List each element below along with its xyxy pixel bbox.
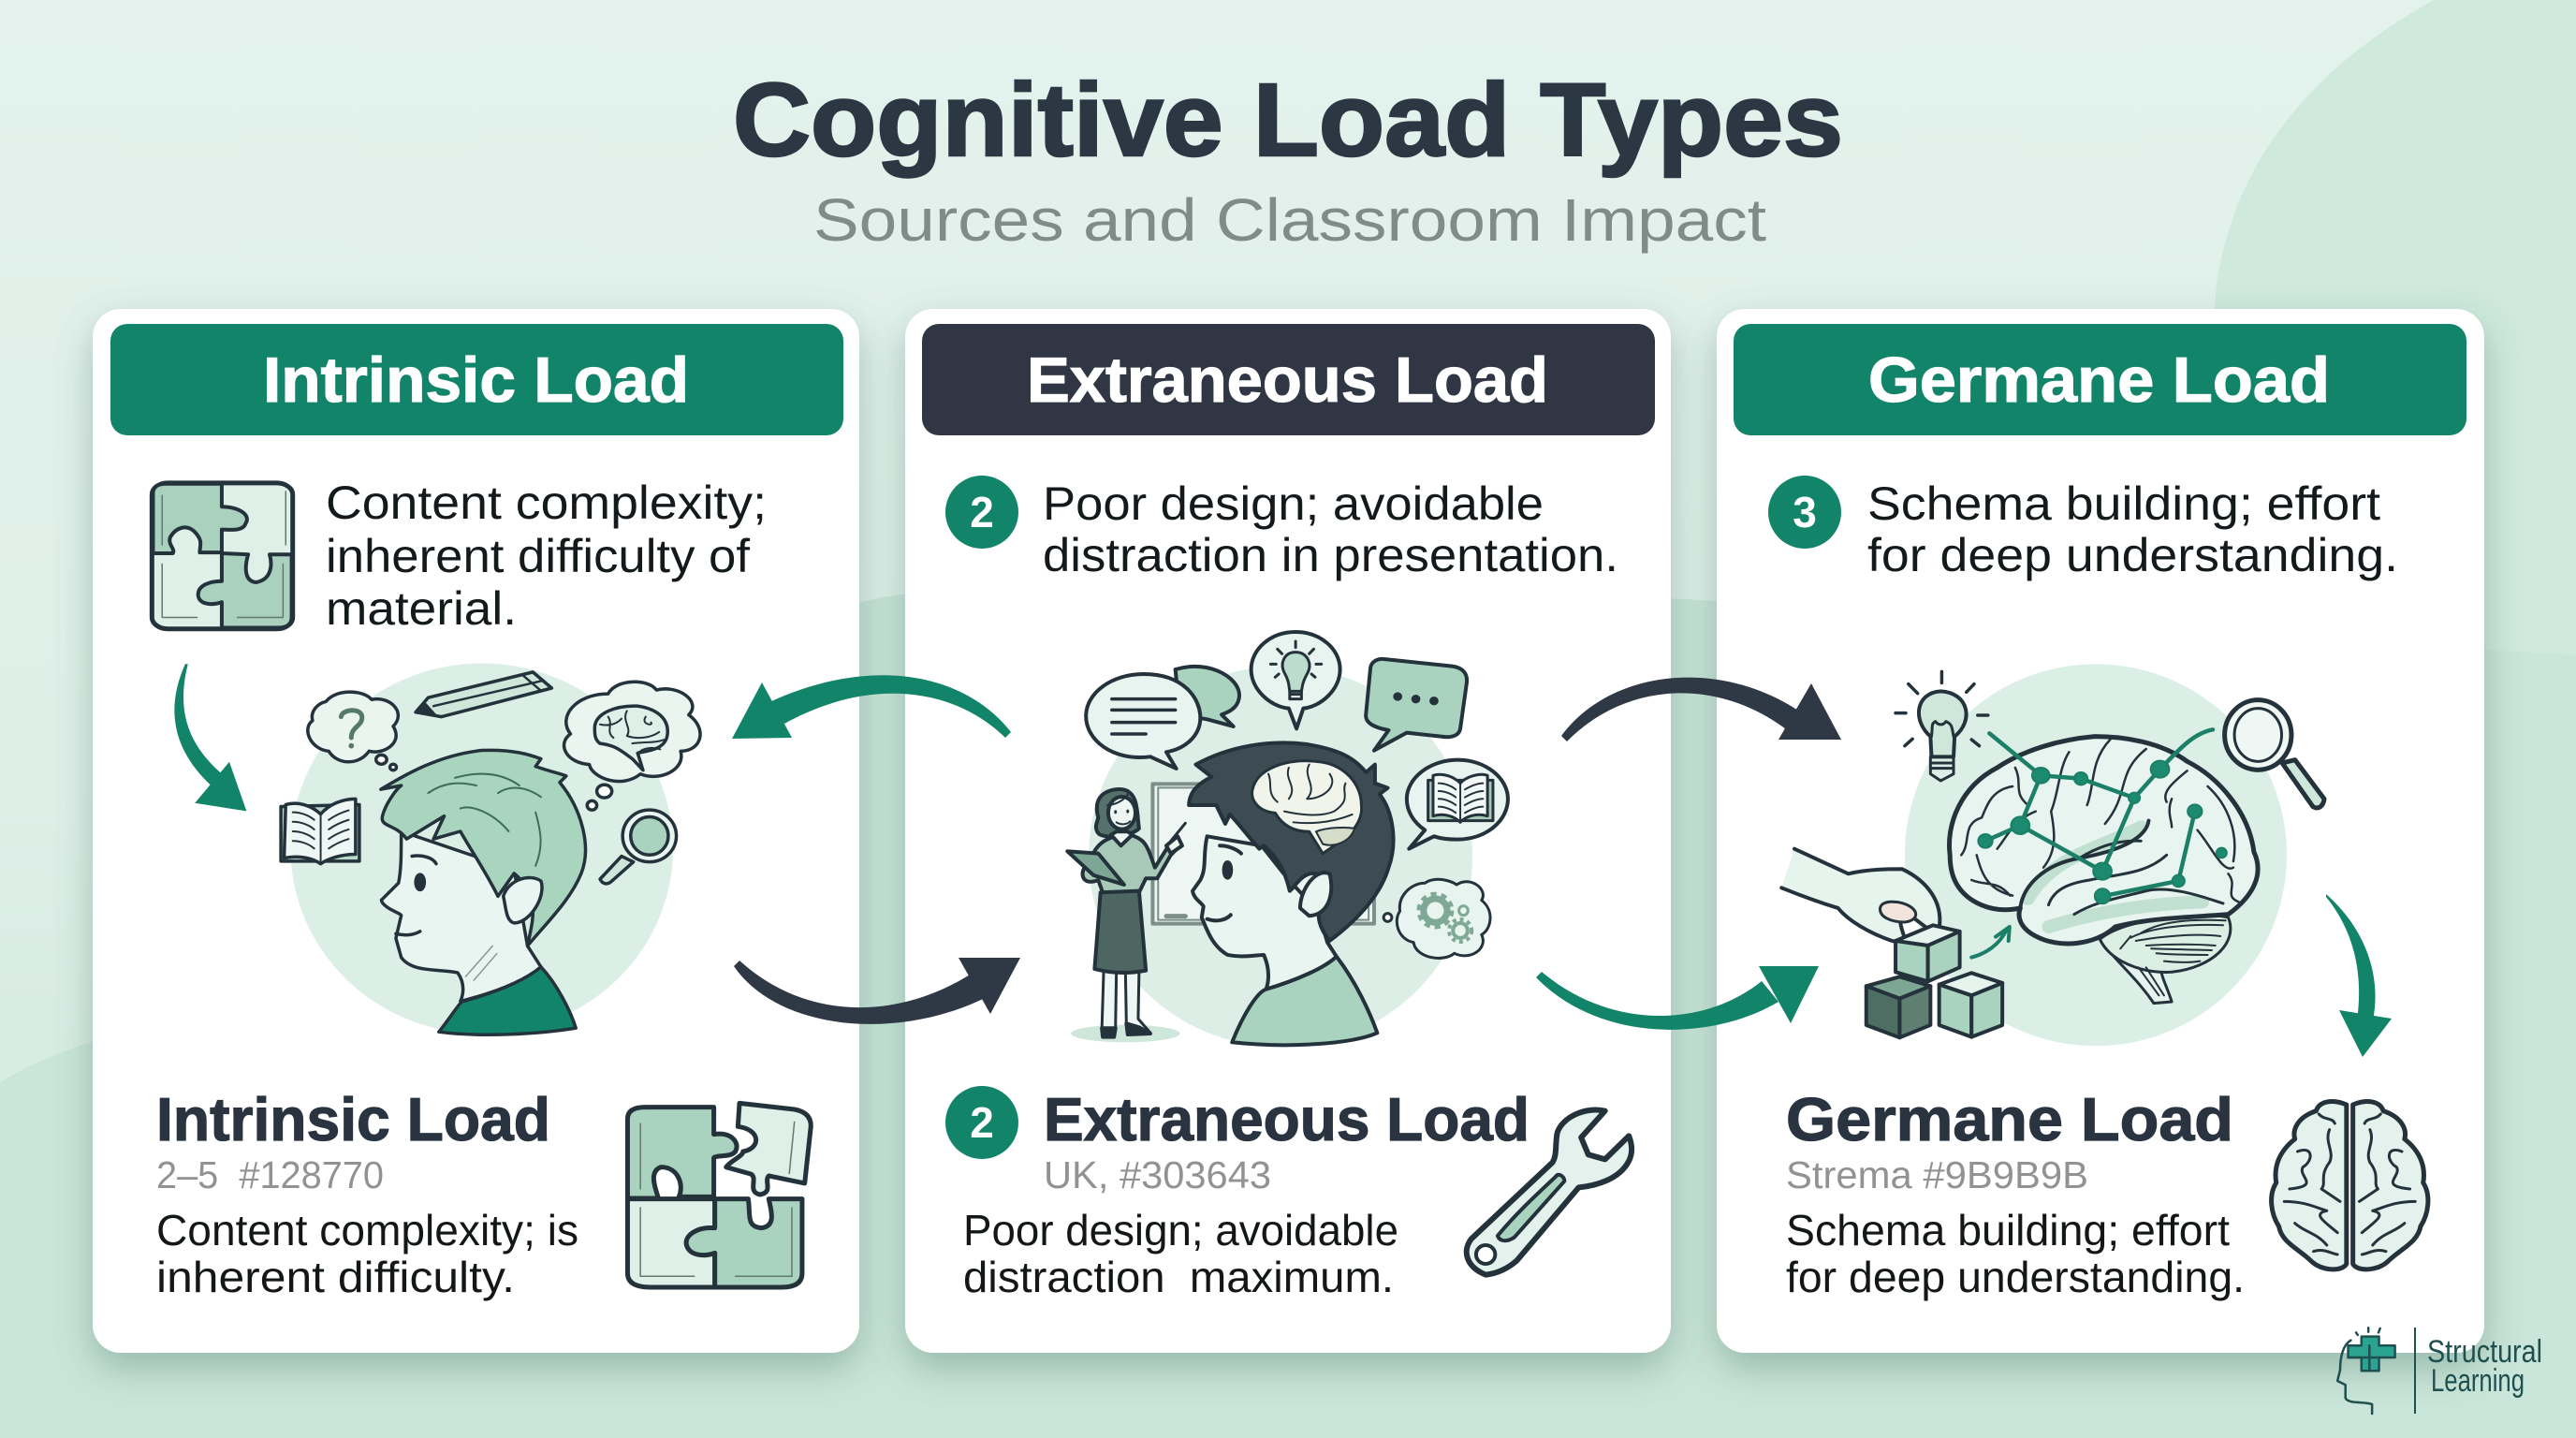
logo text: Learning <box>2431 1363 2525 1399</box>
body: intrinsic: inherent difficulty. <box>156 1253 515 1301</box>
open book <box>281 799 359 864</box>
number badge 2: 2 <box>970 488 994 536</box>
number badge 3: 3 <box>1793 488 1817 536</box>
body: intrinsic: Content complexity; is <box>156 1206 578 1255</box>
text: extraneous description: distraction in presentation. <box>1043 529 1618 581</box>
text: germane description: for deep understanding. <box>1867 529 2398 581</box>
illustration: boy thinking <box>281 663 700 1034</box>
light bulb <box>1895 671 1988 781</box>
meta: intrinsic: 2–5 #128770 <box>156 1153 384 1196</box>
panel: germane load <box>1717 309 2484 1353</box>
text: extraneous description: Poor design; avoidable <box>1043 477 1544 530</box>
text: intrinsic description: inherent difficulty of <box>326 530 750 582</box>
text: germane description: Schema building; effort <box>1867 477 2380 530</box>
icon: separated puzzle <box>627 1103 811 1287</box>
speech bubble: dots <box>1366 659 1467 751</box>
brain with network <box>1949 729 2258 1004</box>
speech bubble: text lines <box>1086 667 1239 769</box>
title: Cognitive Load Types <box>733 63 1843 178</box>
panel: extraneous load <box>905 309 1671 1353</box>
subtitle: Sources and Classroom Impact <box>813 186 1766 254</box>
small green arrow <box>1971 927 2010 958</box>
thought cloud: brain <box>564 682 700 810</box>
body: germane: Schema building; effort <box>1786 1206 2230 1255</box>
body: germane: for deep understanding. <box>1786 1253 2245 1301</box>
card background <box>1717 309 2484 1353</box>
bubble: light bulb <box>1251 632 1340 728</box>
number badge 2 lower: 2 <box>970 1098 994 1147</box>
pencil <box>416 672 551 717</box>
card background <box>905 309 1671 1353</box>
text: intrinsic description: Content complexity; <box>326 477 767 529</box>
hand <box>1781 849 1939 944</box>
thought cloud: question <box>308 692 398 770</box>
meta: germane: Strema #9B9B9B <box>1786 1153 2088 1196</box>
icon: wrench <box>1467 1109 1632 1275</box>
number badge 2 lower <box>945 1086 1018 1159</box>
text: germane description <box>1867 477 2398 581</box>
number badge 3 <box>1768 476 1841 549</box>
number badge 2 <box>945 476 1018 549</box>
body: extraneous: distraction maximum. <box>963 1253 1394 1301</box>
icon: brain top view <box>2272 1102 2428 1269</box>
subheading row: extraneous load <box>945 1085 1530 1159</box>
text: intrinsic description: material. <box>326 582 517 635</box>
subheading: germane load: Germane Load <box>1786 1085 2233 1153</box>
panel: intrinsic load <box>93 309 859 1353</box>
subheading text: Extraneous Load <box>1044 1085 1530 1153</box>
logo divider <box>2414 1328 2416 1414</box>
card background <box>93 309 859 1353</box>
magnifier <box>2225 700 2324 808</box>
meta: extraneous: UK, #303643 <box>1044 1153 1271 1196</box>
header: intrinsic load <box>110 324 843 435</box>
boy head <box>381 750 585 1034</box>
arrow: green curve to left panel <box>732 675 1011 739</box>
header: extraneous load <box>922 324 1655 435</box>
student head with brain <box>1189 742 1394 1045</box>
blocks <box>1866 925 2002 1037</box>
teacher <box>1067 789 1185 1042</box>
body: extraneous <box>963 1206 1398 1301</box>
subheading: intrinsic load: Intrinsic Load <box>156 1085 550 1153</box>
body: intrinsic <box>156 1206 578 1301</box>
logo: structural learning <box>2337 1328 2542 1414</box>
magnifier <box>600 810 677 884</box>
bubble: book <box>1407 760 1508 849</box>
logo icon: head with blocks <box>2337 1328 2395 1414</box>
logo text: Structural <box>2427 1334 2542 1370</box>
illustration: brain network and building blocks <box>1781 664 2324 1046</box>
logo text <box>2427 1334 2542 1399</box>
arrow: dark curve to middle panel <box>734 958 1020 1024</box>
header: extraneous load: Extraneous Load <box>1027 345 1548 416</box>
arrow: green lower curve to right panel <box>1536 966 1819 1030</box>
header: intrinsic load: Intrinsic Load <box>263 345 689 416</box>
text: intrinsic description <box>326 477 767 635</box>
header: germane load: Germane Load <box>1868 345 2330 416</box>
whiteboard <box>1152 784 1374 924</box>
header: germane load <box>1734 324 2466 435</box>
body: germane <box>1786 1206 2245 1301</box>
illustration: teacher and distracted student <box>1067 632 1508 1047</box>
icon: puzzle square <box>152 483 293 629</box>
body: extraneous: Poor design; avoidable <box>963 1206 1398 1255</box>
arrow: green curved down <box>174 664 246 811</box>
thought cloud: gears <box>1383 879 1490 958</box>
arrow: dark curve to right panel <box>1561 678 1841 741</box>
arrow: green curve down to brain icon <box>2326 894 2392 1057</box>
text: extraneous description <box>1043 477 1618 581</box>
